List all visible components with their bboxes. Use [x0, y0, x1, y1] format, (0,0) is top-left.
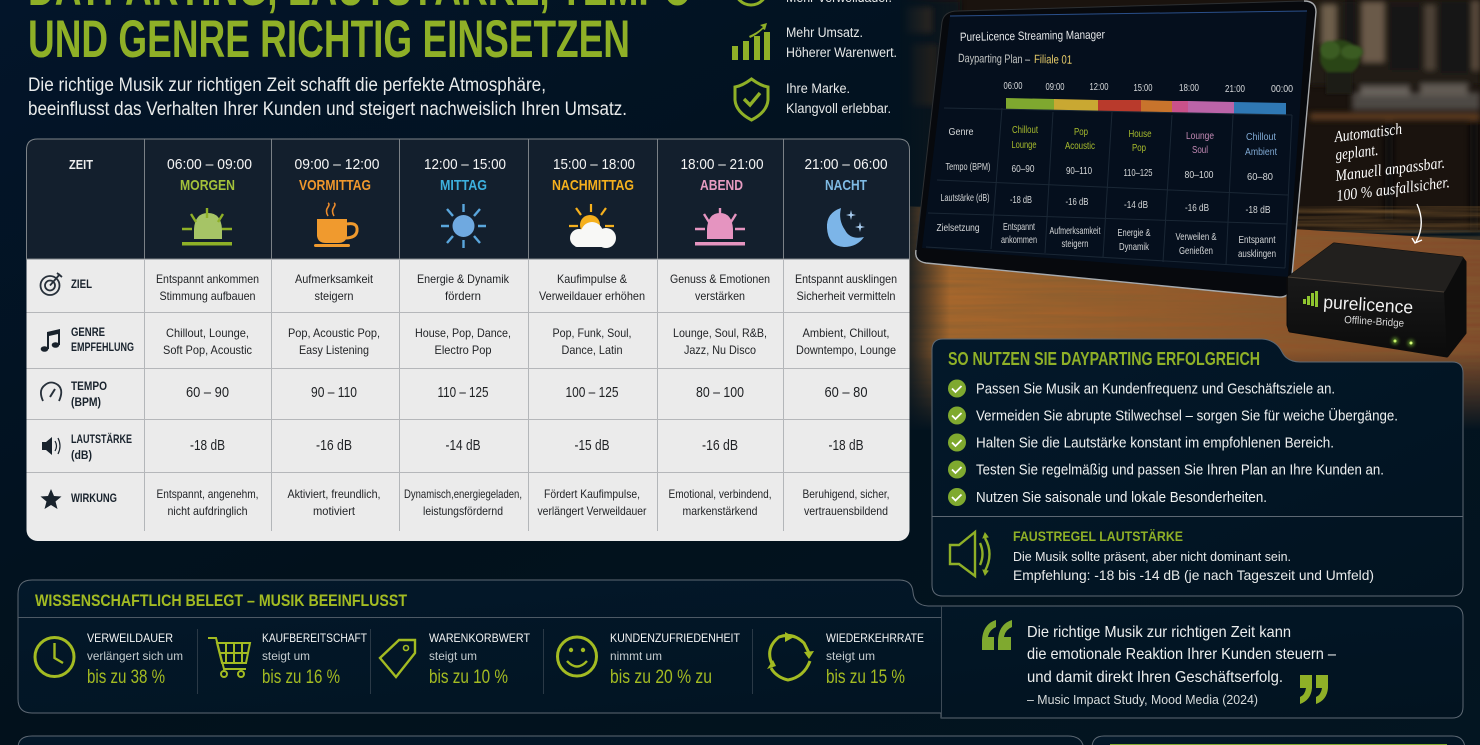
device status LEDs [1392, 338, 1414, 346]
label Tempo: TEMPO [71, 379, 107, 393]
science heading: WISSENSCHAFTLICH BELEGT – MUSIK BEEINFLUSST [35, 591, 408, 610]
check list: Testen Sie regelmäßig und passen Sie Ihren Plan an Ihre Kunden an. [976, 462, 1384, 478]
stat: Wiederkehrrate: bis zu 15 % [826, 667, 905, 688]
panel: bottom left (cropped) [18, 736, 1083, 745]
stat: Verweildauer [35, 631, 183, 688]
device wordmark: purelicence [1323, 292, 1414, 317]
tablet screen heading [958, 27, 1105, 67]
icon: speaker outline [950, 532, 990, 576]
icon: gauge [41, 382, 61, 401]
lautstärke cells: -18 dB [828, 437, 864, 454]
wirkung cells: Beruhigend, sicher, [802, 487, 890, 501]
stat: Kundenzufriedenheit: nimmt um [610, 649, 662, 663]
check list: Halten Sie die Lautstärke konstant im empfohlenen Bereich. [976, 436, 1334, 452]
ziel cells: Stimmung aufbauen [160, 289, 256, 303]
genre cells [163, 326, 896, 357]
label Lautstärke: (dB) [71, 448, 92, 462]
table header labels: NACHT [825, 177, 867, 194]
tablet time labels [1004, 81, 1293, 95]
tablet plan table text: -16 dB [1066, 196, 1088, 208]
icon: opening quote mark [982, 620, 1012, 650]
handwritten note: Automatisch [1333, 121, 1403, 146]
icon: target [40, 273, 62, 295]
label Tempo: (BPM) [71, 395, 101, 409]
tempo cells [186, 384, 868, 401]
tablet plan table text: Lautstärke (dB) [940, 192, 990, 204]
stat: Verweildauer: VERWEILDAUER [87, 631, 173, 645]
benefit: Marke: Klangvoll erlebbar. [786, 101, 891, 116]
stat: Warenkorbwert [380, 631, 531, 688]
label Lautstärke: LAUTSTÄRKE [71, 431, 132, 446]
handwritten note: geplant. [1334, 142, 1379, 164]
tablet plan table text: -18 dB [1246, 204, 1270, 216]
tempo cells: 100 – 125 [566, 384, 618, 401]
tablet time labels: 09:00 [1046, 82, 1065, 93]
tablet plan table text: 90–110 [1066, 165, 1092, 177]
tablet plan table text: 80–100 [1184, 169, 1214, 181]
ziel cells: Entspannt ankommen [156, 272, 259, 286]
benefit: Umsatz: Mehr Umsatz. [786, 25, 863, 40]
tempo cells: 60 – 90 [186, 384, 229, 401]
stat: Kaufbereitschaft: bis zu 16 % [262, 667, 340, 688]
genre cells: Lounge, Soul, R&B, [673, 326, 767, 340]
ziel cells: Kaufimpulse & [557, 272, 627, 286]
icon: sunset pink [695, 208, 745, 246]
tablet plan table text: Aufmerksamkeit [1050, 225, 1101, 237]
tablet grid lines [926, 108, 1292, 268]
title [28, 0, 692, 69]
tablet time labels: 21:00 [1225, 84, 1245, 95]
ziel cells: steigern [314, 289, 354, 303]
tablet plan table text: Pop [1132, 142, 1146, 154]
handwritten note: Manuell anpassbar. [1334, 155, 1446, 185]
tablet timeline colour bar [1006, 98, 1286, 115]
quote text: – Music Impact Study, Mood Media (2024) [1027, 692, 1258, 707]
wirkung cells: Dynamisch,energiegeladen, [404, 487, 522, 501]
tablet plan table text: Zielsetzung [936, 222, 980, 234]
tablet plan table text: steigern [1062, 238, 1089, 250]
ziel cells: Verweildauer erhöhen [539, 289, 645, 303]
device logo [1303, 291, 1318, 307]
label Ziel: ZIEL [71, 277, 92, 291]
icon: shield [735, 79, 768, 120]
label Genre [71, 325, 134, 354]
wirkung cells: motiviert [313, 504, 356, 518]
ziel cells [156, 272, 897, 303]
tablet plan table text: Verweilen & [1176, 231, 1216, 243]
tablet plan table text: House [1128, 128, 1152, 140]
tablet time labels: 06:00 [1004, 81, 1023, 92]
tablet time labels: 18:00 [1179, 83, 1199, 94]
ziel cells: Energie & Dynamik [417, 272, 510, 286]
wirkung cells: Aktiviert, freundlich, [288, 487, 380, 501]
tablet plan table text [936, 124, 1277, 260]
tablet time labels: 00:00 [1271, 84, 1293, 95]
tablet screen heading: Dayparting Plan – [958, 51, 1030, 66]
genre cells: Easy Listening [299, 343, 369, 357]
faustregel text: Empfehlung: -18 bis -14 dB (je nach Tageszeit und Umfeld) [1013, 567, 1374, 583]
icon: clock ring [735, 0, 767, 5]
stat: Kundenzufriedenheit: bis zu 20 % zu [610, 667, 712, 688]
icon: sun behind cloud [569, 204, 616, 248]
quote text: und damit direkt Ihren Geschäftserfolg. [1027, 669, 1283, 686]
stat: Wiederkehrrate [767, 631, 924, 688]
tablet plan table text: -18 dB [1010, 194, 1032, 206]
tablet plan table text: Chillout [1012, 124, 1038, 136]
check list: Nutzen Sie saisonale und lokale Besonderheiten. [976, 490, 1267, 506]
icon: speaker [42, 437, 60, 455]
photo: shop interior with wooden table [900, 0, 1480, 430]
ziel cells: verstärken [695, 289, 745, 303]
stat: Kundenzufriedenheit: KUNDENZUFRIEDENHEIT [610, 631, 741, 645]
arrow to bridge device [1412, 204, 1422, 243]
table header labels: ABEND [700, 177, 743, 194]
icon: star [40, 489, 62, 509]
tablet plan table text: ankommen [1001, 234, 1037, 246]
table header labels: 15:00 – 18:00 [553, 156, 635, 173]
panel: so nutzen sie dayparting erfolgreich [932, 339, 1463, 596]
tablet time labels: 15:00 [1134, 83, 1153, 94]
ziel cells: Aufmerksamkeit [295, 272, 374, 286]
tablet plan table text: Ambient [1245, 146, 1277, 158]
panel: bottom right with green bar (cropped) [1092, 736, 1465, 745]
quote text [1027, 624, 1336, 707]
row: Tempo [41, 379, 867, 409]
icon: sunrise green [182, 208, 232, 246]
subtitle: Die richtige Musik zur richtigen Zeit schafft die perfekte Atmosphäre, [28, 75, 546, 96]
genre cells: Soft Pop, Acoustic [163, 343, 252, 357]
wirkung cells: Emotional, verbindend, [668, 487, 772, 501]
genre cells: Pop, Funk, Soul, [552, 326, 632, 340]
lautstärke cells: -15 dB [574, 437, 610, 454]
quote [982, 620, 1336, 707]
stat: Warenkorbwert: WARENKORBWERT [429, 631, 531, 645]
check list: Vermeiden Sie abrupte Stilwechsel – sorgen Sie für weiche Übergänge. [976, 406, 1398, 424]
table header labels [69, 156, 888, 194]
stat: Wiederkehrrate: steigt um [826, 649, 875, 663]
handwritten note: 100 % ausfallsicher. [1335, 174, 1451, 205]
genre cells: Ambient, Chillout, [802, 326, 890, 340]
benefit: Umsatz [786, 25, 897, 60]
ziel cells: fördern [445, 289, 481, 303]
tablet plan table text: Acoustic [1065, 140, 1095, 152]
tablet plan table text: 60–90 [1012, 163, 1035, 175]
label Wirkung: WIRKUNG [71, 491, 117, 505]
tablet: PureLicence Streaming Manager [916, 1, 1316, 297]
stat: Warenkorbwert: steigt um [429, 649, 477, 663]
genre cells: Downtempo, Lounge [796, 343, 896, 357]
row: Genre [41, 325, 896, 357]
tablet plan table text: Tempo (BPM) [946, 161, 990, 173]
stat: Kaufbereitschaft: KAUFBEREITSCHAFT [262, 631, 368, 645]
stat: Kaufbereitschaft [208, 631, 368, 688]
genre cells: House, Pop, Dance, [415, 326, 511, 340]
label Genre: GENRE [71, 325, 105, 339]
genre cells: Dance, Latin [562, 343, 622, 357]
genre cells: Chillout, Lounge, [166, 326, 249, 340]
stat: Verweildauer: bis zu 38 % [87, 667, 165, 688]
subtitle: beeinflusst das Verhalten Ihrer Kunden und steigert nachweislich Ihren Umsatz. [28, 99, 627, 120]
tablet plan table text: Soul [1192, 144, 1208, 156]
tablet plan table text: Pop [1074, 126, 1088, 138]
tablet plan table text: Genre [948, 126, 974, 138]
wirkung cells: Fördert Kaufimpulse, [544, 487, 640, 501]
lautstärke cells: -14 dB [446, 437, 480, 454]
tablet plan table text: Chillout [1246, 131, 1276, 143]
tablet plan table text: Lounge [1012, 139, 1037, 151]
wirkung cells [156, 487, 890, 518]
icon: music note [41, 329, 60, 352]
tempo cells: 60 – 80 [824, 384, 868, 401]
panel heading: SO NUTZEN SIE DAYPARTING ERFOLGREICH [948, 349, 1260, 369]
stat: Kaufbereitschaft: steigt um [262, 649, 310, 663]
tempo cells: 110 – 125 [438, 384, 488, 401]
label Genre: EMPFEHLUNG [71, 340, 134, 354]
icon: coffee cup [314, 203, 357, 247]
tablet plan table text: ausklingen [1238, 248, 1276, 260]
stat: Warenkorbwert: bis zu 10 % [429, 667, 508, 688]
lautstärke cells: -16 dB [702, 437, 738, 454]
quote text: Die richtige Musik zur richtigen Zeit kann [1027, 624, 1291, 641]
table header labels: 12:00 – 15:00 [424, 156, 506, 173]
table header labels: MORGEN [180, 177, 235, 194]
panel: wissenschaftlich belegt and quote frame [18, 580, 1463, 718]
table header labels: 06:00 – 09:00 [167, 156, 252, 173]
handwritten note [1333, 121, 1451, 205]
label Tempo [71, 379, 107, 409]
row: Ziel [40, 272, 897, 303]
device: purelicence offline bridge [1288, 244, 1465, 357]
check list [948, 380, 1398, 506]
tablet plan table text: Entspannt [1003, 221, 1035, 233]
tablet time labels: 12:00 [1090, 82, 1109, 93]
stat: Kundenzufriedenheit [558, 631, 741, 688]
tablet plan table text: Energie & [1118, 227, 1150, 239]
tablet screen heading: PureLicence Streaming Manager [960, 27, 1105, 44]
lautstärke cells [190, 437, 864, 454]
tablet plan table text: 60–80 [1247, 171, 1273, 183]
genre cells: Pop, Acoustic Pop, [288, 326, 380, 340]
wirkung cells: vertrauensbildend [804, 504, 888, 518]
faustregel text [1013, 528, 1374, 583]
device subtitle: Offline-Bridge [1344, 314, 1405, 330]
ziel cells: Sicherheit vermitteln [796, 289, 896, 303]
subtitle [28, 75, 627, 120]
row: Wirkung [40, 487, 890, 518]
ziel cells: Genuss & Emotionen [670, 272, 770, 286]
dayparting table [26, 139, 910, 541]
tablet plan table text: Entspannt [1238, 234, 1276, 246]
tablet plan table text: Dynamik [1119, 241, 1150, 253]
tablet plan table text: Lounge [1186, 130, 1214, 142]
table header labels: MITTAG [440, 177, 487, 194]
icon: closing quote mark [1300, 675, 1328, 704]
faustregel text: FAUSTREGEL LAUTSTÄRKE [1013, 528, 1183, 544]
genre cells: Electro Pop [434, 343, 492, 357]
genre cells: Jazz, Nu Disco [684, 343, 756, 357]
table header labels: 18:00 – 21:00 [680, 156, 764, 173]
wirkung cells: nicht aufdringlich [168, 504, 248, 518]
tablet plan table text: -16 dB [1185, 202, 1209, 214]
table header labels: VORMITTAG [299, 177, 371, 194]
table header labels: NACHMITTAG [552, 177, 634, 194]
title: UND GENRE RICHTIG EINSETZEN [28, 10, 630, 69]
quote text: die emotionale Reaktion Ihrer Kunden steuern – [1027, 646, 1336, 663]
row: Lautstärke [42, 431, 864, 462]
wirkung cells: markenstärkend [682, 504, 758, 518]
check list: Passen Sie Musik an Kundenfrequenz und Geschäftsziele an. [976, 382, 1335, 398]
ziel cells: Entspannt ausklingen [795, 272, 897, 286]
faustregel text: Die Musik sollte präsent, aber nicht dominant sein. [1013, 549, 1291, 564]
tempo cells: 80 – 100 [696, 384, 744, 401]
tablet plan table text: -14 dB [1124, 199, 1148, 211]
tablet screen heading: Filiale 01 [1034, 52, 1072, 67]
lautstärke cells: -16 dB [316, 437, 352, 454]
tempo cells: 90 – 110 [311, 384, 357, 401]
icon: rising bars [732, 23, 770, 60]
wirkung cells: leistungsfördernd [423, 504, 503, 518]
tablet plan table text: Genießen [1179, 245, 1213, 257]
icon: sun [441, 204, 486, 248]
table header labels: ZEIT [69, 157, 93, 172]
wirkung cells: verlängert Verweildauer [538, 504, 646, 518]
stat: Wiederkehrrate: WIEDERKEHRRATE [826, 631, 924, 645]
table header labels: 21:00 – 06:00 [804, 156, 888, 173]
label Lautstärke [71, 431, 132, 462]
benefits list [732, 0, 897, 120]
benefit: Umsatz: Höherer Warenwert. [786, 45, 897, 60]
table header labels: 09:00 – 12:00 [294, 156, 380, 173]
tablet plan table text: 110–125 [1124, 167, 1153, 179]
wirkung cells: Entspannt, angenehm, [156, 487, 258, 501]
icon: moon and stars [827, 208, 865, 247]
lautstärke cells: -18 dB [190, 437, 225, 454]
stat: Verweildauer: verlängert sich um [87, 649, 183, 663]
benefit: Marke [786, 81, 891, 116]
benefit: Marke: Ihre Marke. [786, 81, 850, 96]
